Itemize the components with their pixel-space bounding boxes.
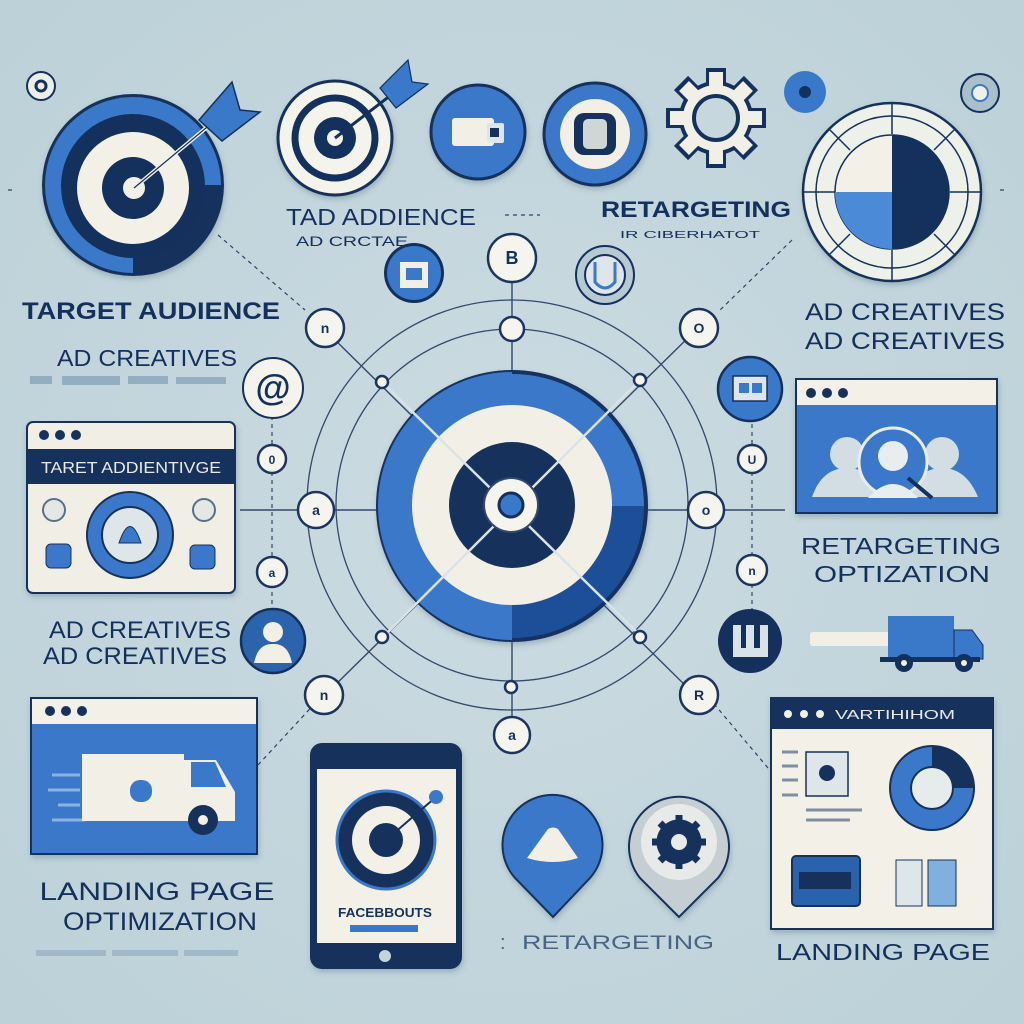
audience silhouettes xyxy=(812,437,978,497)
central target diagram xyxy=(240,234,785,753)
pie chart, top right xyxy=(803,103,981,281)
icon: small grey dot, top right xyxy=(961,74,999,112)
window dots xyxy=(784,710,824,718)
icon: gear xyxy=(666,68,766,168)
heading: landing page optimization: OPTIMIZATION xyxy=(63,908,257,936)
icon: navy badge xyxy=(718,609,782,673)
icon: blue browser badge xyxy=(718,357,782,421)
heading: ad creatives right: AD CREATIVES xyxy=(805,328,1005,355)
node glyphs: n xyxy=(320,687,328,703)
orbit rings xyxy=(307,300,717,710)
spokes xyxy=(240,265,785,735)
icon: blue circle square xyxy=(544,83,646,185)
truck xyxy=(82,754,184,821)
left card xyxy=(806,752,848,796)
heading: retargeting top: RETARGETING xyxy=(601,197,791,222)
target rings xyxy=(376,370,648,642)
panel: browser target audience xyxy=(27,422,235,593)
panel: blue browser audience xyxy=(796,379,997,513)
text: retargeting bottom: RETARGETING xyxy=(522,932,714,954)
window dots xyxy=(806,388,848,398)
donut chart xyxy=(890,746,974,830)
bottom left card xyxy=(792,856,860,906)
heading: tad audience xyxy=(286,204,476,249)
icon: person badge xyxy=(241,609,305,673)
icon: delivery truck right xyxy=(810,616,983,672)
heading: retargeting top xyxy=(601,197,791,241)
icon: big target with arrow, top left xyxy=(42,82,260,276)
node glyphs: n xyxy=(321,320,329,336)
icon: blue circle card xyxy=(431,85,525,179)
panel: dashboard right xyxy=(771,698,993,929)
node glyphs: U xyxy=(748,453,756,467)
heading: landing page optimization xyxy=(36,878,274,956)
title bar xyxy=(28,449,234,484)
node glyphs: o xyxy=(702,502,710,518)
text: retargeting bottom: : xyxy=(500,932,506,954)
text: ad creatives left: AD CREATIVES xyxy=(57,345,237,371)
icon: small blue dot, top xyxy=(784,71,826,113)
heading: ad creatives right: AD CREATIVES xyxy=(805,299,1005,326)
node glyphs xyxy=(269,248,756,743)
connector lines xyxy=(8,85,1008,768)
icon: small corner dot, top left xyxy=(27,72,55,100)
node glyphs: 0 xyxy=(269,453,276,467)
node glyphs: a xyxy=(508,727,516,743)
icon: blue map pin xyxy=(502,795,602,917)
heading: ad creatives lower left xyxy=(43,617,231,670)
icon: gear map pin xyxy=(629,797,729,917)
heading: landing page optimization: LANDING PAGE xyxy=(40,878,274,906)
icon: grey shield badge xyxy=(576,246,634,304)
nodes xyxy=(257,234,767,753)
node glyphs: n xyxy=(748,564,756,578)
title text: TARET ADDIENTIVGE xyxy=(41,460,221,477)
node glyphs: a xyxy=(269,566,276,580)
faded caption bars xyxy=(36,950,238,956)
icon: at sign xyxy=(243,358,303,418)
sub heading: faded caption: IR CIBERHATOT xyxy=(620,230,760,241)
heading: ad creatives right xyxy=(805,299,1005,355)
node glyphs: R xyxy=(694,687,704,703)
heading: landing page right: LANDING PAGE xyxy=(776,939,990,965)
panel: delivery browser xyxy=(31,698,257,854)
node glyphs: a xyxy=(312,502,320,518)
icon: blue square badge xyxy=(384,243,444,303)
center hub xyxy=(484,478,538,532)
heading: ad creatives lower left: AD CREATIVES xyxy=(49,617,231,644)
phone label: FACEBBOUTS xyxy=(338,905,432,920)
small icons xyxy=(43,499,215,521)
node glyphs: B xyxy=(506,248,518,268)
icon: at sign: @ xyxy=(255,367,291,408)
heading: tad audience: TAD ADDIENCE xyxy=(286,204,476,230)
speed lines xyxy=(48,775,85,820)
magnifier xyxy=(859,428,932,498)
icon: second target with arrow xyxy=(278,60,428,195)
node glyphs: O xyxy=(694,320,705,336)
phone target xyxy=(337,791,435,889)
sub heading: ad creatives: AD CRCTAE xyxy=(296,233,408,249)
window dots xyxy=(45,706,87,716)
heading: retargeting optimization xyxy=(801,533,1001,587)
text: retargeting bottom xyxy=(500,932,714,954)
icon: smartphone xyxy=(310,743,462,969)
spokes over target xyxy=(382,380,640,638)
faded caption bars xyxy=(30,376,226,385)
window dots xyxy=(39,430,81,440)
heading: retargeting optimization: RETARGETING xyxy=(801,533,1001,559)
title bar text: VARTIHIHOM xyxy=(835,707,955,722)
circle target xyxy=(87,492,173,578)
text: ad creatives left xyxy=(30,345,237,385)
heading: retargeting optimization: OPTIZATION xyxy=(814,561,990,587)
heading: ad creatives lower left: AD CREATIVES xyxy=(43,643,227,670)
heading: target audience: TARGET AUDIENCE xyxy=(22,298,280,325)
bottom right cards xyxy=(896,860,922,906)
